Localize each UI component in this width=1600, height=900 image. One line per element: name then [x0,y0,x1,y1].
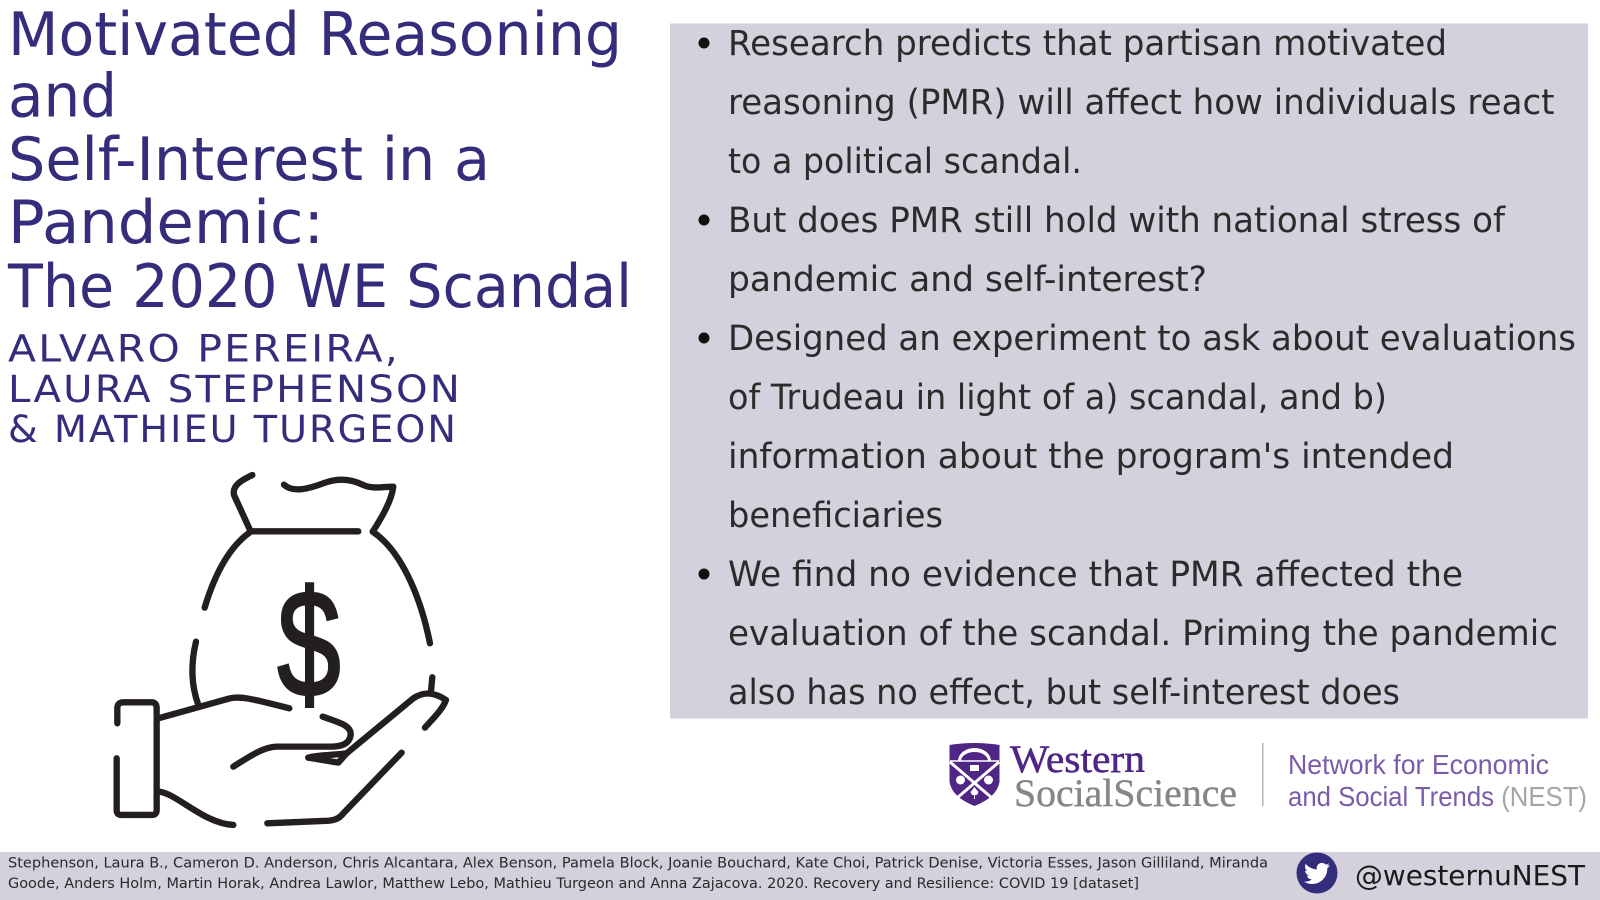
logo: Western wordmark: Western [1010,738,1145,781]
icon: hand holding money bag [117,475,446,825]
authors [8,328,462,451]
bullet 4 [698,555,1558,713]
bullet 1 [698,24,1554,182]
citation: Goode, Anders Holm, Martin Horak, Andrea Lawlor, Matthew Lebo, Mathieu Turgeon and Anna Zajacova. 2020. Recovery and Resilience: COVID 19 [dataset] [8,876,1139,892]
bullet 3: information about the program's intended [728,437,1454,477]
logo: Western Social Science shield [950,743,1000,806]
bullet 2 [698,201,1506,300]
bullet 4: also has no effect, but self-interest does [728,673,1400,713]
panel: summary bullets [670,24,1588,718]
icon: twitter [1296,852,1338,894]
bullet 4: We find no evidence that PMR affected the [728,555,1463,595]
citation: Stephenson, Laura B., Cameron D. Anderson, Chris Alcantara, Alex Benson, Pamela Block, Joanie Bouchard, Kate Choi, Patrick Denise, Victoria Esses, Jason Gilliland, Miranda [8,856,1268,872]
bullet 2: pandemic and self-interest? [728,260,1207,300]
authors: ALVARO PEREIRA, [8,328,400,370]
title: Pandemic: [8,188,324,258]
twitter handle: @westernuNEST [1355,859,1586,892]
title: The 2020 WE Scandal [7,252,632,322]
logo: Network for Economic and Social Trends: Network for Economic [1288,749,1549,780]
bullet 3: beneficiaries [728,496,943,536]
bullet 3: Designed an experiment to ask about evaluations [728,319,1576,359]
title: Self-Interest in a [8,125,490,195]
bullet 4: evaluation of the scandal. Priming the pandemic [728,614,1558,654]
icon: hand holding money bag: $ [277,560,341,729]
bullet 3: of Trudeau in light of a) scandal, and b) [728,378,1387,418]
bullet 1: reasoning (PMR) will affect how individuals react [728,83,1554,123]
logo: Network for Economic and Social Trends [1288,749,1587,812]
bullet 1: Research predicts that partisan motivated [728,24,1447,64]
title: and [8,62,117,132]
authors: & MATHIEU TURGEON [8,408,458,451]
bullet 2: But does PMR still hold with national stress of [728,201,1506,241]
footer band [0,852,1600,900]
logo: Western wordmark: SocialScience [1014,772,1237,815]
authors: LAURA STEPHENSON [8,368,462,411]
title: Motivated Reasoning [8,0,622,70]
title [7,0,632,322]
logo: Western wordmark [1010,738,1237,815]
logo: Network for Economic and Social Trends: and Social Trends (NEST) [1288,781,1587,812]
bullet 1: to a political scandal. [728,142,1082,182]
bullet 3 [698,319,1576,536]
citation [8,856,1268,892]
